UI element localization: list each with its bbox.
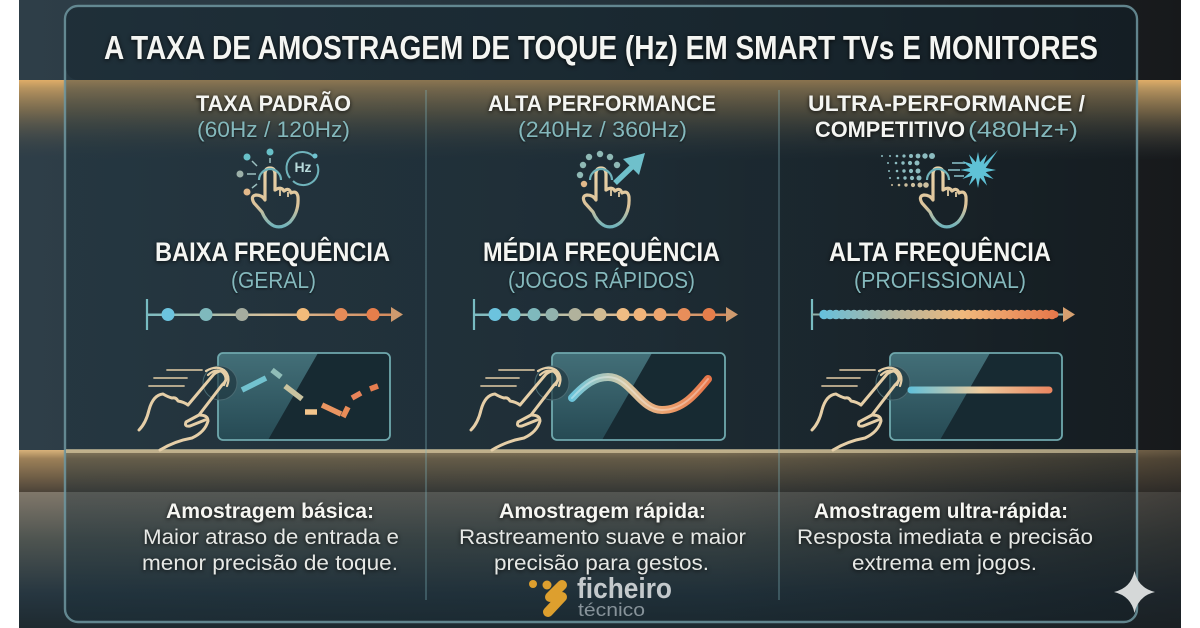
logo: ficheiro técnico — [529, 573, 672, 620]
icon: touch with Hz — [236, 148, 318, 227]
icon: touch with rising arrow — [577, 151, 645, 227]
illustration: swipe with continuous line — [812, 353, 1062, 450]
subheading: profissional: (PROFISSIONAL) — [854, 267, 1026, 293]
heading: ultra-performance: ULTRA-PERFORMANCE / — [808, 91, 1085, 116]
timeline: medium samples — [474, 299, 738, 330]
description: amostragem básica: menor precisão de toque. — [142, 552, 398, 575]
timeline: continuous samples — [812, 299, 1075, 330]
icon: touch with Hz: Hz — [294, 159, 312, 175]
heading: alta frequência: ALTA FREQUÊNCIA — [829, 236, 1051, 267]
heading: baixa frequência: BAIXA FREQUÊNCIA — [155, 236, 390, 267]
description: amostragem rápida: precisão para gestos. — [494, 552, 709, 575]
column divider right — [778, 90, 780, 600]
description: amostragem básica: Amostragem básica: — [166, 500, 374, 523]
description: amostragem básica — [142, 500, 399, 575]
subheading: jogos rápidos: (JOGOS RÁPIDOS) — [508, 267, 695, 293]
heading: taxa padrão: TAXA PADRÃO — [196, 91, 351, 116]
subheading: geral: (GERAL) — [231, 267, 316, 293]
description: amostragem ultra-rápida: extrema em jogos. — [852, 552, 1037, 575]
subheading: 60Hz / 120Hz: (60Hz / 120Hz) — [197, 117, 350, 142]
description: amostragem ultra-rápida: Amostragem ultra-rápida: — [814, 500, 1068, 523]
subheading: 480Hz+: (480Hz+) — [968, 117, 1078, 142]
logo: ficheiro técnico: ficheiro — [577, 573, 672, 605]
panel: taxa padrão — [139, 91, 403, 575]
panel: alta performance — [459, 91, 746, 575]
description: amostragem rápida: Amostragem rápida: — [499, 500, 706, 523]
logo: ficheiro técnico: técnico — [578, 600, 645, 620]
panel: ultra-performance — [797, 91, 1093, 575]
description: amostragem rápida — [459, 500, 746, 575]
icon: touch with burst — [881, 150, 998, 227]
heading: competitivo: COMPETITIVO — [815, 117, 965, 142]
heading: alta performance: ALTA PERFORMANCE — [488, 91, 716, 116]
description: amostragem rápida: Rastreamento suave e maior — [459, 526, 746, 549]
timeline: sparse samples — [147, 299, 403, 330]
column divider left — [425, 90, 427, 600]
illustration: swipe with smooth curve — [471, 353, 725, 450]
illustration: swipe with broken trace — [139, 353, 390, 450]
heading: média frequência: MÉDIA FREQUÊNCIA — [483, 236, 720, 267]
icon: sparkle watermark — [1114, 571, 1155, 613]
description: amostragem ultra-rápida — [797, 500, 1093, 575]
description: amostragem básica: Maior atraso de entrada e — [143, 526, 399, 549]
subheading: 240Hz / 360Hz: (240Hz / 360Hz) — [518, 117, 687, 142]
description: amostragem ultra-rápida: Resposta imediata e precisão — [797, 526, 1093, 549]
